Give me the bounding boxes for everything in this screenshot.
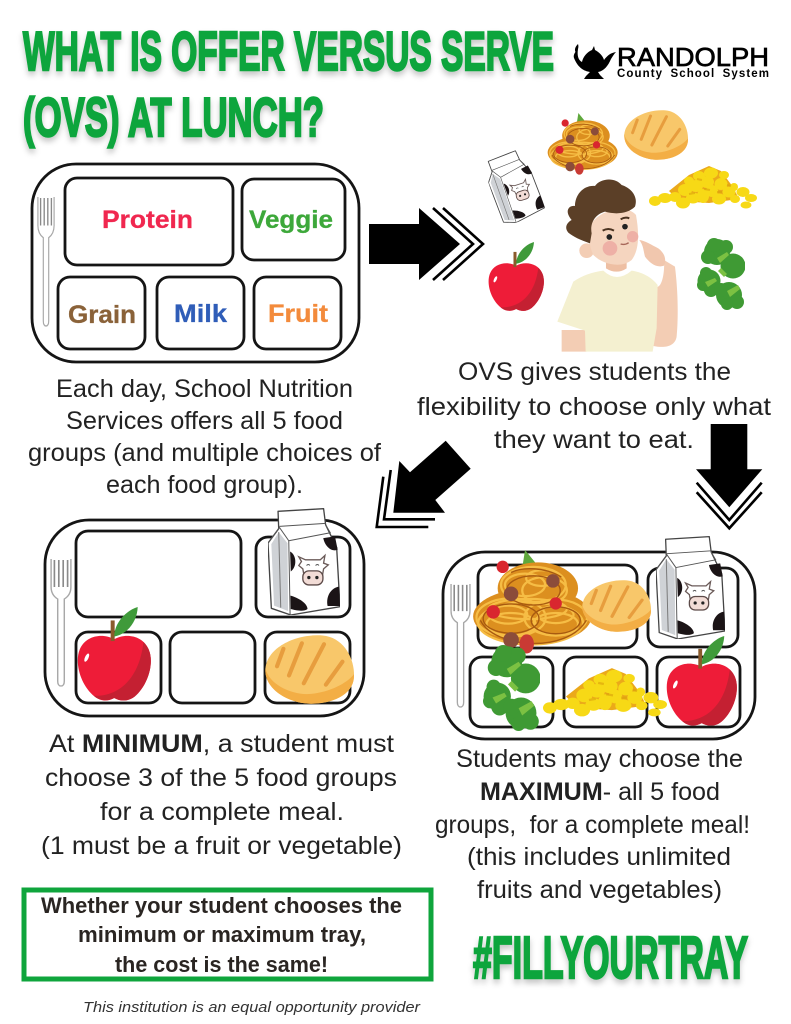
icon: fork [51, 559, 71, 686]
illustration: food choices and thinking student [482, 110, 757, 352]
callout: cost is the same: Whether your student chooses the [41, 893, 402, 918]
text: maximum [435, 745, 750, 904]
icon: milk carton [482, 147, 547, 227]
panel: maximum tray [443, 537, 755, 739]
icon: milk carton [656, 537, 725, 639]
text: each day: each food group). [106, 471, 303, 499]
icon: apple [667, 636, 737, 726]
text: maximum: MAXIMUM- all 5 food [480, 778, 720, 806]
milk compartment [157, 277, 244, 349]
student [557, 179, 678, 352]
icon: apple [489, 242, 544, 311]
protein compartment: Protein [102, 206, 193, 234]
fruit compartment [254, 277, 341, 349]
grain compartment [58, 277, 145, 349]
icon: corn [649, 166, 757, 208]
footer note: This institution is an equal opportunity provider [83, 999, 421, 1016]
text: OVS flexibility: OVS gives students the [458, 358, 731, 386]
text: OVS flexibility [417, 358, 771, 454]
icon: corn [543, 668, 667, 716]
text: minimum: choose 3 of the 5 food groups [45, 764, 397, 792]
protein compartment [65, 178, 233, 265]
title [23, 20, 554, 148]
callout: cost is the same [24, 890, 431, 979]
panel: labelled tray [32, 164, 359, 362]
text: maximum: (this includes unlimited [467, 843, 731, 871]
arrow: down [696, 424, 762, 528]
text: minimum [41, 730, 402, 860]
icon: bread [265, 635, 354, 704]
icon: milk carton [268, 509, 340, 615]
arrow: down-left [377, 441, 471, 527]
icon: bread [582, 580, 651, 632]
text: minimum: for a complete meal. [100, 798, 344, 826]
icon: bread [624, 110, 688, 160]
text: each day: Each day, School Nutrition [56, 375, 353, 403]
logo: Randolph County School System [574, 42, 769, 80]
text: OVS flexibility: flexibility to choose only what [417, 393, 771, 421]
text: maximum: Students may choose the [456, 745, 743, 773]
text: minimum: (1 must be a fruit or vegetable) [41, 832, 402, 860]
text: each day [28, 375, 381, 499]
logo: Randolph County School System: County School System [617, 68, 769, 80]
fruit compartment: Fruit [268, 300, 329, 328]
grain compartment: Grain [68, 301, 136, 329]
icon: apple [78, 607, 151, 700]
text: maximum: groups, for a complete meal! [435, 811, 750, 839]
icon: lamp [574, 44, 616, 79]
text: each day: groups (and multiple choices of [28, 439, 381, 467]
veggie compartment: Veggie [249, 206, 333, 234]
icon: broccoli [697, 238, 746, 310]
icon: pasta [473, 550, 591, 653]
text: maximum: fruits and vegetables) [477, 876, 722, 904]
callout: cost is the same: minimum or maximum tray, [78, 922, 366, 947]
milk compartment: Milk [174, 300, 227, 328]
text: each day: Services offers all 5 food [66, 407, 343, 435]
logo: Randolph County School System: RANDOLPH [617, 42, 769, 72]
icon: pasta [548, 113, 618, 175]
callout: cost is the same: the cost is the same! [115, 952, 328, 977]
icon: fork [451, 584, 470, 707]
title: (OVS) AT LUNCH? [23, 86, 324, 148]
panel: minimum tray [45, 509, 364, 716]
icon: fork [38, 197, 54, 326]
icon: broccoli [483, 645, 541, 731]
veggie compartment [242, 179, 345, 260]
arrow: right [369, 208, 483, 280]
text: minimum: At MINIMUM , a student must [49, 730, 394, 758]
text: OVS flexibility: they want to eat. [494, 426, 694, 454]
